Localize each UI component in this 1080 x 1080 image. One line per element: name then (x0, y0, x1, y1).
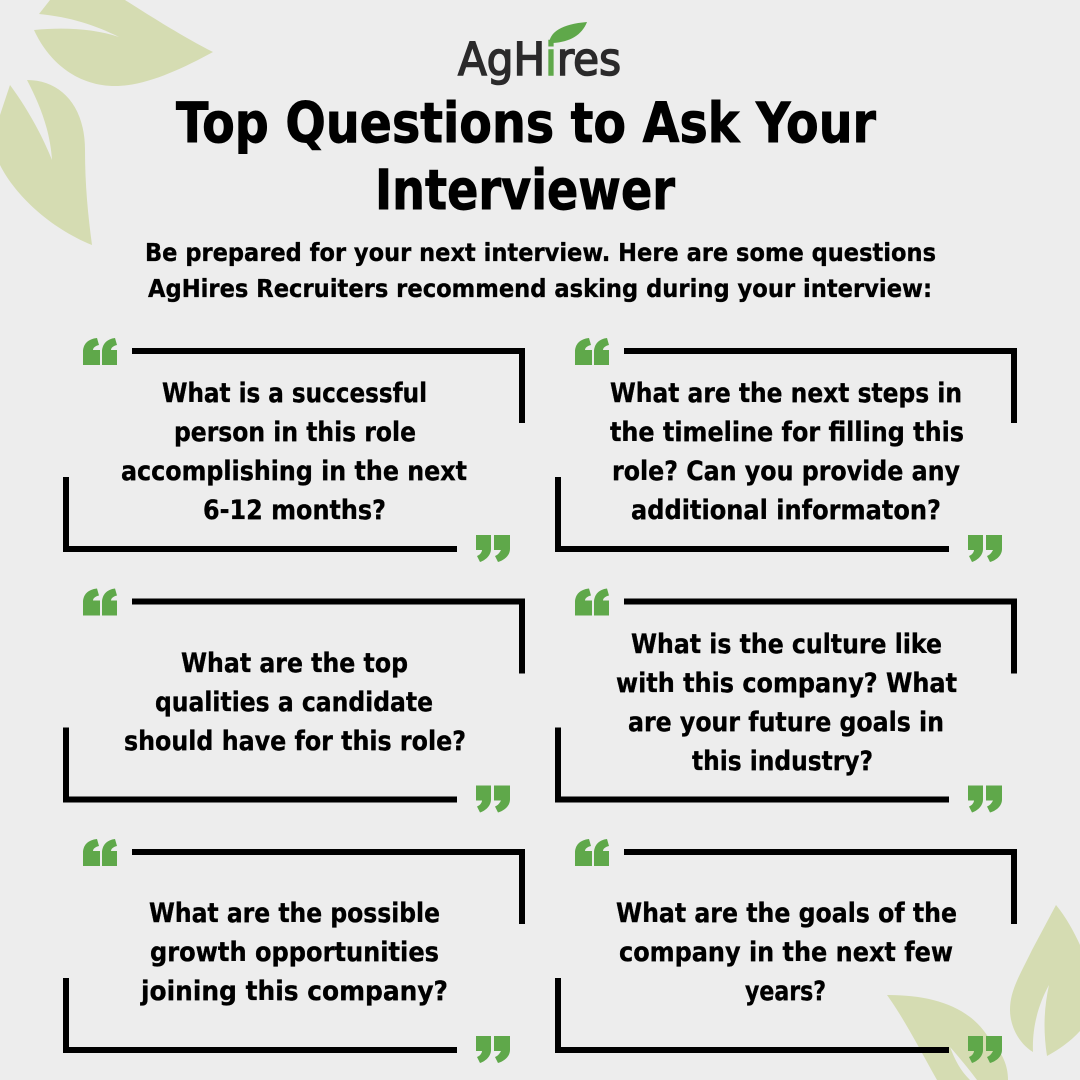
card: company goals (555, 839, 1017, 1063)
leaf: top left upper (34, 0, 213, 86)
card: company goals: company in the next few (619, 937, 953, 968)
card: company goals: What are the goals of the (616, 898, 957, 929)
logo wordmark: AgHires (458, 33, 621, 86)
intro text (145, 238, 936, 303)
card: top qualities (63, 588, 525, 812)
card: next steps: additional informaton? (631, 495, 941, 526)
card: growth opportunities (63, 839, 525, 1063)
card: top qualities: should have for this role? (124, 726, 466, 757)
logo (458, 22, 621, 86)
card: successful person (63, 338, 525, 562)
intro text: AgHires Recruiters recommend asking during your interview: (148, 274, 932, 303)
card: culture: are your future goals in (628, 707, 944, 738)
leaf: bottom right lower (887, 995, 1008, 1080)
card: growth opportunities: growth opportunities (150, 937, 439, 968)
card: growth opportunities: What are the possible (149, 898, 440, 929)
card: company goals: years? (745, 976, 826, 1007)
card: next steps: What are the next steps in (610, 378, 962, 409)
intro text: Be prepared for your next interview. Here are some questions (145, 238, 936, 267)
card: next steps (555, 338, 1017, 562)
title (176, 91, 876, 222)
card: next steps: the timeline for filling this (610, 417, 964, 448)
card: successful person: What is a successful (162, 378, 427, 409)
card: culture (555, 588, 1017, 812)
card: growth opportunities: joining this company? (140, 976, 448, 1007)
title: Top Questions to Ask Your (176, 91, 876, 155)
logo leaf (549, 22, 587, 46)
card: top qualities: What are the top (181, 648, 408, 679)
leaf: bottom right upper (1010, 905, 1080, 1056)
card: successful person: 6-12 months? (203, 495, 386, 526)
title: Interviewer (375, 158, 675, 222)
leaf: top left lower (0, 80, 92, 245)
card: culture: with this company? What (616, 668, 957, 699)
card: successful person: accomplishing in the next (121, 456, 467, 487)
card: successful person: person in this role (174, 417, 416, 448)
card: top qualities: qualities a candidate (155, 687, 433, 718)
card: next steps: role? Can you provide any (612, 456, 960, 487)
card: culture: What is the culture like (631, 629, 942, 660)
card: culture: this industry? (692, 746, 873, 777)
